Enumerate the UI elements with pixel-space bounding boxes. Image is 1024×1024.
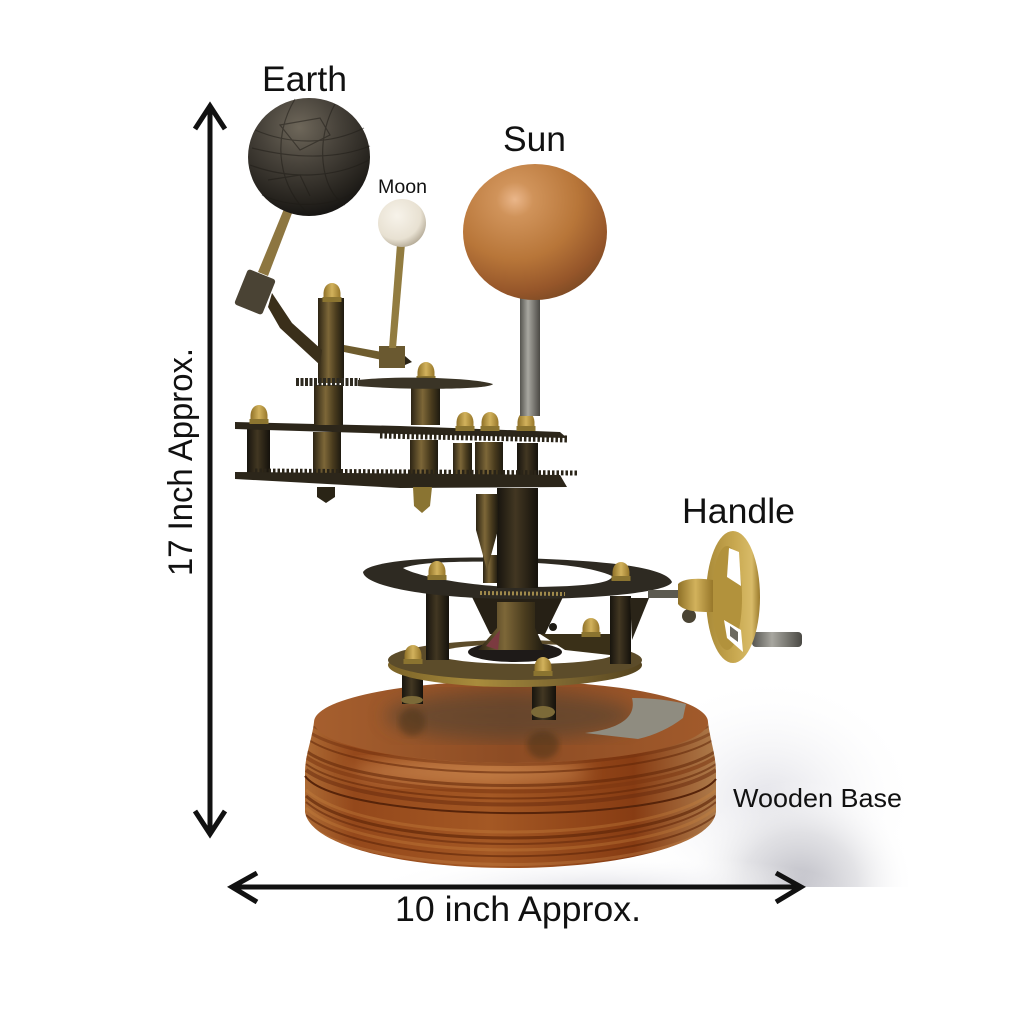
height arrow [195, 106, 225, 834]
label: width: 10 inch Approx. [395, 890, 641, 929]
label: Sun: Sun [503, 120, 566, 159]
gear ring [363, 558, 672, 599]
label: Earth: Earth [262, 60, 347, 99]
wooden base [305, 681, 716, 868]
wood grain [306, 722, 716, 864]
label: Wooden Base: Wooden Base [733, 783, 902, 813]
lower ring nuts [404, 645, 552, 676]
upper plate [235, 405, 568, 439]
lower ring [388, 640, 642, 687]
label: Moon: Moon [378, 177, 427, 198]
earth arm [234, 204, 322, 365]
label: Handle: Handle [682, 492, 795, 531]
metal plate on base [585, 698, 686, 739]
middle pillars [426, 588, 649, 664]
lower gear plate [235, 428, 578, 513]
handle [648, 531, 802, 663]
label: height: 17 Inch Approx. [162, 348, 200, 576]
moon arm [344, 244, 412, 368]
width arrow [232, 873, 801, 902]
upper pillars and gears [296, 283, 493, 425]
central column upper [428, 488, 630, 588]
moon globe [378, 199, 426, 247]
central column lower [472, 597, 563, 650]
feet [401, 672, 556, 720]
earth globe [248, 98, 370, 216]
sun rod [520, 298, 540, 416]
sun globe [463, 164, 607, 300]
base shadow [491, 741, 884, 887]
